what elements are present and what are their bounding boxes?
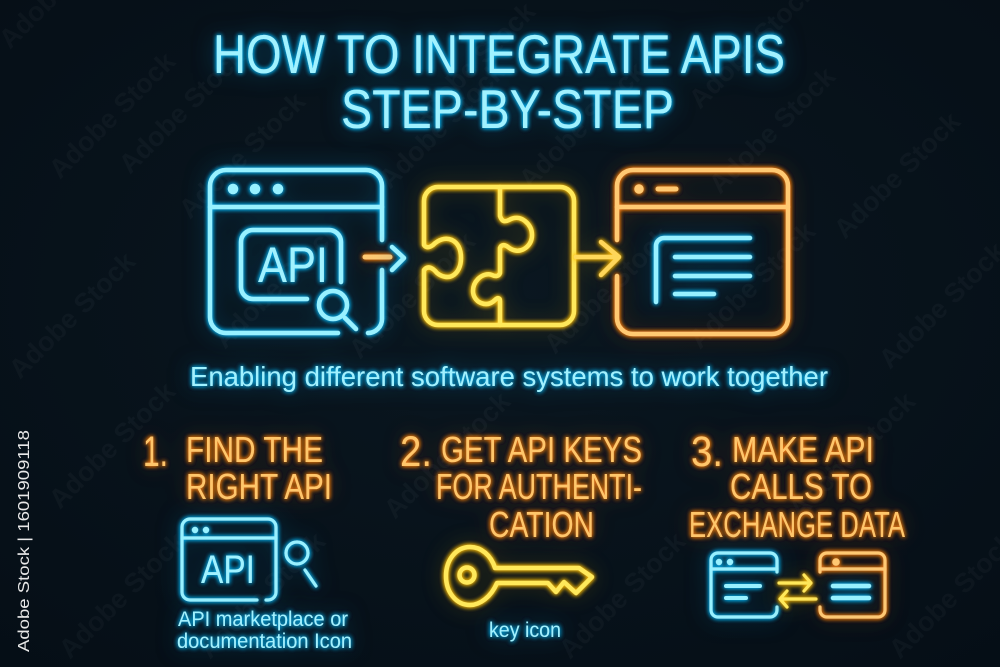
stock watermarks: Adobe Stock: [3, 246, 142, 384]
icon: key: [446, 547, 592, 605]
caption: API marketplace: API marketplace or: [178, 608, 348, 631]
stock watermarks: Adobe Stock: [683, 216, 822, 354]
arrow: puzzle to output window: [576, 242, 619, 275]
stock watermarks: Adobe Stock: [553, 526, 692, 664]
stock watermarks: Adobe Stock: [703, 61, 842, 199]
step 1 heading: 1.: [143, 428, 168, 476]
stock watermarks: Adobe Stock: [403, 0, 542, 134]
stock watermarks: Adobe Stock: [828, 106, 967, 244]
icon: server data lines: [833, 586, 869, 598]
stock watermarks: Adobe Stock: [43, 46, 182, 184]
stock watermarks: Adobe Stock: [173, 86, 312, 224]
stock watermarks: Adobe Stock: [53, 526, 192, 664]
caption: key icon: key icon: [489, 619, 561, 642]
stock watermarks: Adobe Stock: [113, 41, 252, 179]
step 1 heading: RIGHT API: [186, 466, 332, 507]
stock watermarks: Adobe Stock: [538, 221, 677, 359]
arrow chevron: [392, 247, 404, 270]
stock watermarks: Adobe Stock: [783, 386, 922, 524]
subtitle: Enabling different software systems to work together: [190, 361, 828, 392]
stock watermarks: Adobe Stock: [378, 386, 517, 524]
stock watermarks: Adobe Stock: [513, 56, 652, 194]
icon: API marketplace window: API: [201, 548, 255, 592]
icon: client window: [711, 553, 777, 617]
stock watermarks: Adobe Stock: [373, 56, 512, 194]
arrow: API to puzzle: [365, 254, 390, 260]
icon: output browser window: [617, 170, 788, 334]
step 2 heading: FOR AUTHENTI-: [436, 466, 642, 507]
step 2 heading: GET API KEYS: [441, 429, 642, 470]
title: [213, 23, 785, 140]
stock watermarks: Adobe Stock: [43, 376, 182, 514]
icon: document lines: [656, 238, 750, 302]
step 2 heading: 2.: [400, 428, 432, 476]
icon: exchange arrows: [779, 575, 816, 607]
step 3 heading: MAKE API: [732, 429, 874, 470]
step 2 heading: CATION: [489, 504, 594, 545]
icon: API marketplace window: [182, 519, 316, 600]
step 2 heading: [400, 428, 642, 545]
caption: API marketplace: documentation Icon: [177, 630, 352, 653]
step 1 heading: FIND THE: [186, 429, 323, 470]
stock id side label: Adobe Stock | 1601909118: [16, 430, 33, 652]
caption: API marketplace: [177, 608, 352, 653]
title: STEP-BY-STEP: [341, 78, 674, 140]
icon: API browser window with magnifier: [210, 170, 382, 333]
icon: puzzle pieces: [424, 187, 574, 325]
stock watermarks: Adobe Stock: [343, 226, 482, 364]
step 1 heading: [143, 428, 332, 507]
stock watermarks: Adobe Stock: [208, 216, 347, 354]
step 3 heading: EXCHANGE DATA: [689, 504, 905, 545]
icon: API browser window with magnifier: API: [258, 237, 328, 293]
step 3 heading: 3.: [691, 428, 723, 476]
icon: server window: [820, 553, 885, 617]
step 3 heading: [689, 428, 905, 545]
stock watermarks: Adobe Stock: [193, 526, 332, 664]
title: HOW TO INTEGRATE APIS: [213, 23, 785, 85]
step 3 heading: CALLS TO: [730, 466, 872, 507]
